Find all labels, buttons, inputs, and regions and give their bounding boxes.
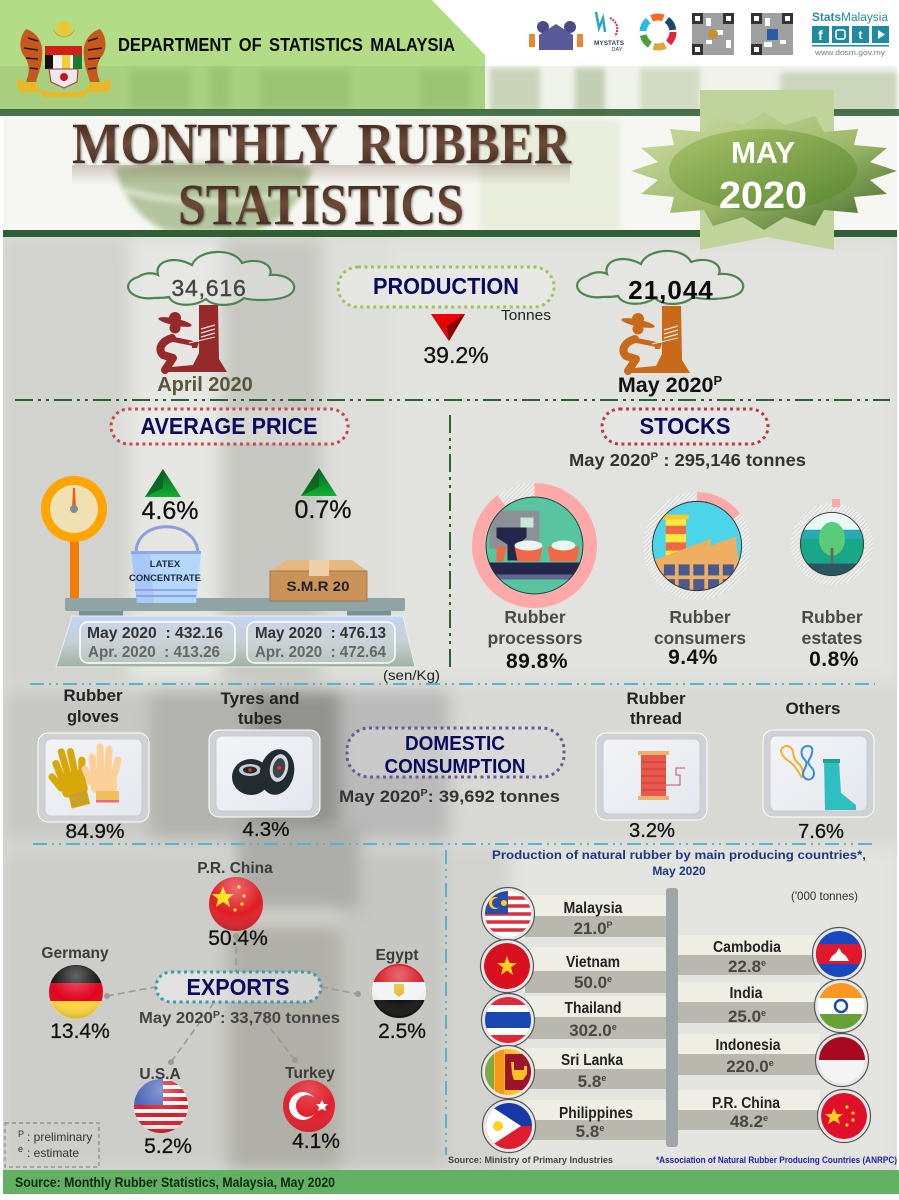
footer source bar: Source: Monthly Rubber Statistics, Malaysia, May 2020 [15,1174,335,1190]
tyres and tubes item: Tyres and [220,690,300,708]
philippines row: Philippines [559,1105,633,1122]
malaysia row: 21.0 [573,919,607,938]
icon: mystats day logo: MYSTATS [594,40,625,47]
source: ministry: Source: Ministry of Primary Industries [448,1155,613,1165]
StatsMalaysia social block: www.dosm.gov.my [814,48,885,57]
sri lanka row: 5.8 [578,1072,601,1091]
turkey export: Turkey [285,1065,335,1082]
rubber thread item: thread [630,710,682,728]
rubber gloves item [38,687,149,843]
domestic total: P [420,788,428,799]
title: MONTHLY RUBBER [72,111,572,176]
cambodia row: Cambodia [713,939,781,956]
date badge: 2020 [719,175,807,217]
malaysia row: P [607,920,613,930]
icon: rubber bands and boots [781,746,856,810]
china row [678,1090,870,1142]
domestic consumption heading: CONSUMPTION [384,756,526,778]
rubber consumers label: Rubber [669,607,731,627]
chart heading: Production of natural rubber by main producing countries*, [492,848,866,862]
domestic total: May 2020 [339,787,415,806]
header organisation name: DEPARTMENT OF STATISTICS MALAYSIA [118,35,455,55]
icon: tyres [232,746,298,798]
others item [763,700,874,843]
latex price box: Apr. 2020 : 413.26 [88,644,220,661]
icon: latex bucket [129,527,201,603]
tyres and tubes item [209,690,320,841]
stocks heading: STOCKS [640,413,730,439]
legend: e [18,1144,23,1154]
india row: India [730,985,763,1002]
date badge [631,90,897,250]
change down [423,308,551,368]
cambodia row: 22.8 [728,957,761,976]
egypt export: Egypt [375,947,419,964]
exports total: P [213,1010,220,1021]
icon: census logo [529,21,583,50]
rubber processors label: processors [488,628,583,648]
icon: latex bucket: CONCENTRATE [129,573,201,584]
panel: production by country [448,848,897,1166]
panel: average price [41,409,440,683]
panel: stocks [478,409,869,673]
title: STATISTICS [178,172,464,237]
indonesia row [678,1034,868,1086]
usa export: 5.2% [144,1135,192,1158]
icon: malaysia coat of arms [16,21,112,97]
panel: exports [5,860,426,1167]
production heading pill: PRODUCTION [373,273,519,299]
april production cloud and tapper: 34,616 [171,275,247,301]
thailand row: Thailand [564,1000,622,1017]
tyres and tubes item: tubes [238,710,282,728]
chart heading [492,848,866,878]
header band [0,0,485,110]
rubber consumers label: 9.4% [668,646,718,669]
chart heading: May 2020 [652,864,706,878]
may production cloud and tapper: May 2020 [618,373,713,397]
vietnam row: Vietnam [566,954,620,971]
china row: e [763,1113,768,1123]
unit: ('000 tonnes) [791,889,858,903]
indonesia row: 220.0 [726,1057,769,1076]
rubber processors label: Rubber [504,607,566,627]
icon: qr code right [750,12,794,56]
rubber processors label: 89.8% [506,650,568,673]
germany export: Germany [41,945,109,962]
rubber estates ring and icon [795,499,869,581]
StatsMalaysia social block: f [818,27,823,43]
legend: : preliminary [27,1130,92,1144]
smr 20 price box: May 2020 : 476.13 [255,625,386,642]
date badge: MAY [731,135,795,170]
egypt export: 2.5% [378,1020,426,1043]
egypt export [372,947,426,1043]
rubber processors label [488,607,583,673]
icon: mystats day logo [594,12,625,53]
rubber consumers ring and icon [648,496,746,596]
smr 20 price box [247,622,395,663]
rubber consumers label: consumers [654,628,746,648]
rubber thread item [596,690,707,842]
germany export: 13.4% [50,1020,110,1043]
icon: weighing scale [41,476,415,667]
icon: gloves [47,747,119,811]
icon: qr code left [691,12,735,56]
china row: 48.2 [730,1112,763,1131]
tyres and tubes item: 4.3% [242,819,290,841]
china export: 50.4% [208,927,268,950]
StatsMalaysia social block [812,12,889,57]
production heading pill [338,267,554,307]
malaysia row: Malaysia [564,900,623,917]
StatsMalaysia social block: t [858,28,862,42]
legend: P [18,1129,24,1139]
china export [197,860,273,950]
exports heading [156,972,321,1002]
rubber estates label [801,607,863,671]
may production cloud and tapper [577,251,743,397]
china row: P.R. China [712,1095,780,1112]
title [72,111,572,237]
thailand row: e [612,1022,617,1032]
icon: smr 20 box: S.M.R 20 [286,578,350,594]
change down: Tonnes [501,308,551,324]
turkey export: 4.1% [292,1130,340,1153]
rubber thread item: Rubber [626,690,686,708]
sri lanka row [482,1046,666,1098]
StatsMalaysia social block: StatsMalaysia [812,12,889,24]
exports total: : 33,780 tonnes [220,1010,340,1027]
unit: (sen/Kg) [383,667,440,683]
domestic consumption heading: DOMESTIC [405,733,505,755]
rubber estates label: Rubber [801,607,863,627]
cambodia row [678,928,866,980]
stocks total: May 2020 [569,450,647,470]
panel: production [128,251,743,397]
philippines row [482,1100,666,1152]
average price heading pill [111,409,348,444]
domestic total: : 39,692 tonnes [428,787,560,806]
may production cloud and tapper: P [713,373,722,388]
logos row [529,12,889,57]
india row: e [761,1008,766,1018]
india row: 25.0 [728,1007,761,1026]
exports total: May 2020 [139,1010,208,1027]
stocks total: : 295,146 tonnes [658,450,806,470]
philippines row: e [599,1123,604,1133]
vietnam row [480,940,666,993]
usa export: U.S.A [139,1066,181,1083]
others item: Others [786,700,840,718]
stocks total: P [651,451,658,463]
smr change [295,468,351,524]
rubber processors ring and icon [478,490,590,602]
icon: sustainable development goals wheel [643,17,673,47]
smr 20 price box: Apr. 2020 : 472.64 [255,644,386,661]
rubber thread item: 3.2% [629,820,675,842]
icon: mystats day logo: DAY [612,47,623,53]
sri lanka row: e [601,1073,606,1083]
rubber gloves item: gloves [67,708,119,726]
vietnam row: e [607,974,612,984]
china export: P.R. China [197,860,273,877]
india row [678,980,868,1032]
panel: domestic consumption [38,687,874,843]
stocks heading [602,409,768,444]
rubber gloves item: Rubber [64,687,123,705]
latex change: 4.6% [142,497,198,525]
icon: spool [638,751,685,800]
icon: latex bucket: LATEX [150,559,181,570]
section dividers [15,400,890,1155]
turkey export [283,1065,340,1153]
malaysia row [482,888,666,940]
indonesia row: Indonesia [716,1037,781,1054]
rubber consumers label [654,607,746,669]
rubber estates label: 0.8% [809,648,859,671]
change down: 39.2% [423,342,489,368]
cambodia row: e [761,958,766,968]
exports heading: EXPORTS [186,974,290,1000]
legend: : estimate [27,1146,79,1160]
others item: 7.6% [798,821,844,843]
germany export [41,945,110,1043]
april production cloud and tapper: April 2020 [157,374,253,396]
domestic consumption heading [347,728,564,778]
thailand row: 302.0 [569,1021,612,1040]
smr change: 0.7% [295,496,351,524]
may production cloud and tapper: 21,044 [628,275,714,305]
icon: smr 20 box [270,560,367,601]
rubber gloves item: 84.9% [66,821,125,843]
thailand row [482,994,666,1046]
title band rules [0,109,899,237]
legend [5,1123,99,1167]
latex price box [80,622,235,663]
centre pillar [666,888,678,1147]
latex change [142,469,198,525]
rubber estates label: estates [802,628,863,648]
average price heading pill: AVERAGE PRICE [140,413,318,439]
indonesia row: e [769,1058,774,1068]
export connectors [104,933,361,1065]
latex price box: May 2020 : 432.16 [87,625,223,642]
april production cloud and tapper [128,252,294,396]
philippines row: 5.8 [576,1122,599,1141]
usa export [134,1066,192,1158]
sri lanka row: Sri Lanka [561,1052,623,1069]
vietnam row: 50.0 [574,973,607,992]
footer source bar [3,1170,899,1194]
